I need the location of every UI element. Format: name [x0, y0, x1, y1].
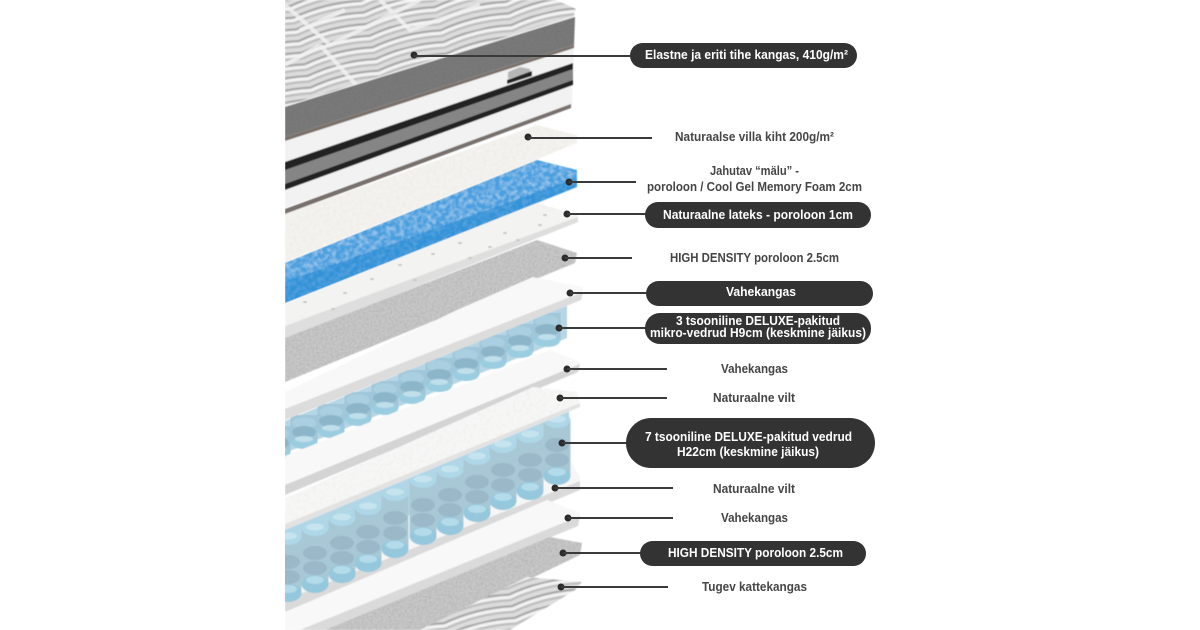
- layer: bottom fabric: [420, 577, 582, 630]
- callout 11: felt: [552, 482, 796, 496]
- callout 2: wool: Naturaalse villa kiht 200g/m²: [675, 130, 834, 144]
- layer: natural felt 2: [285, 460, 580, 612]
- callout 1: elastic fabric: Elastne ja eriti tihe kangas, 410g/m²: [645, 48, 848, 62]
- layer: natural latex: [285, 203, 578, 338]
- callout 13: high density foam: HIGH DENSITY poroloon 2.5cm: [668, 546, 843, 560]
- callout 9: felt: Naturaalne vilt: [713, 391, 796, 405]
- callout 8: spacer fabric: Vahekangas: [721, 362, 788, 376]
- callout 10: main springs: [558, 418, 875, 468]
- layer: spacer fabric 1: [285, 277, 583, 420]
- layer: main spring unit: [274, 405, 570, 602]
- callout 6: spacer fabric: [566, 281, 873, 306]
- callout 3: cool gel memory foam: Jahutav “mälu” -: [710, 164, 799, 178]
- mattress cross-section illustration: [264, 0, 583, 630]
- callout 10: main springs: H22cm (keskmine jäikus): [677, 445, 819, 459]
- callout 4: latex: [564, 202, 871, 228]
- callout 14: bottom fabric: [558, 580, 807, 594]
- layer: high density foam: [285, 240, 577, 382]
- callout 12: spacer fabric: Vahekangas: [721, 511, 788, 525]
- layer: spacer fabric 2: [285, 350, 580, 495]
- callout 1: elastic fabric: [410, 43, 857, 68]
- layer: cooling gel memory foam: [285, 160, 577, 303]
- layer: grey knit border: [285, 17, 575, 137]
- callout 7: micro springs: mikro-vedrud H9cm (keskmine jäikus): [650, 326, 866, 340]
- layer: micro spring unit: [264, 305, 567, 460]
- layer: quilted top panel: [285, 0, 576, 107]
- layer: high density foam 2: [325, 537, 582, 630]
- layer: spacer fabric 3: [285, 500, 580, 630]
- callout 14: bottom fabric: Tugev kattekangas: [702, 580, 807, 594]
- callout 11: felt: Naturaalne vilt: [713, 482, 796, 496]
- callout 8: spacer fabric: [564, 362, 788, 376]
- layer: natural felt 1: [285, 387, 580, 530]
- callout 9: felt: [556, 391, 796, 405]
- callout 2: wool: [524, 130, 834, 144]
- callout 7: micro springs: 3 tsooniline DELUXE-pakitud: [676, 314, 840, 328]
- callout 12: spacer fabric: [564, 511, 788, 525]
- callout 5: high density foam: HIGH DENSITY poroloon 2.5cm: [670, 251, 839, 265]
- callout 10: main springs: 7 tsooniline DELUXE-pakitud vedrud: [645, 430, 852, 444]
- callout 4: latex: Naturaalne lateks - poroloon 1cm: [663, 208, 853, 222]
- callout 5: high density foam: [562, 251, 839, 265]
- callout 13: high density foam: [560, 541, 866, 566]
- callout 6: spacer fabric: Vahekangas: [726, 285, 796, 299]
- layer: white mattress side with stripes: [285, 45, 574, 214]
- callout 7: micro springs: [556, 313, 871, 344]
- callout 3: cool gel memory foam: [566, 164, 862, 194]
- layer: natural wool: [285, 125, 577, 262]
- callout 3: cool gel memory foam: poroloon / Cool Gel Memory Foam 2cm: [647, 180, 862, 194]
